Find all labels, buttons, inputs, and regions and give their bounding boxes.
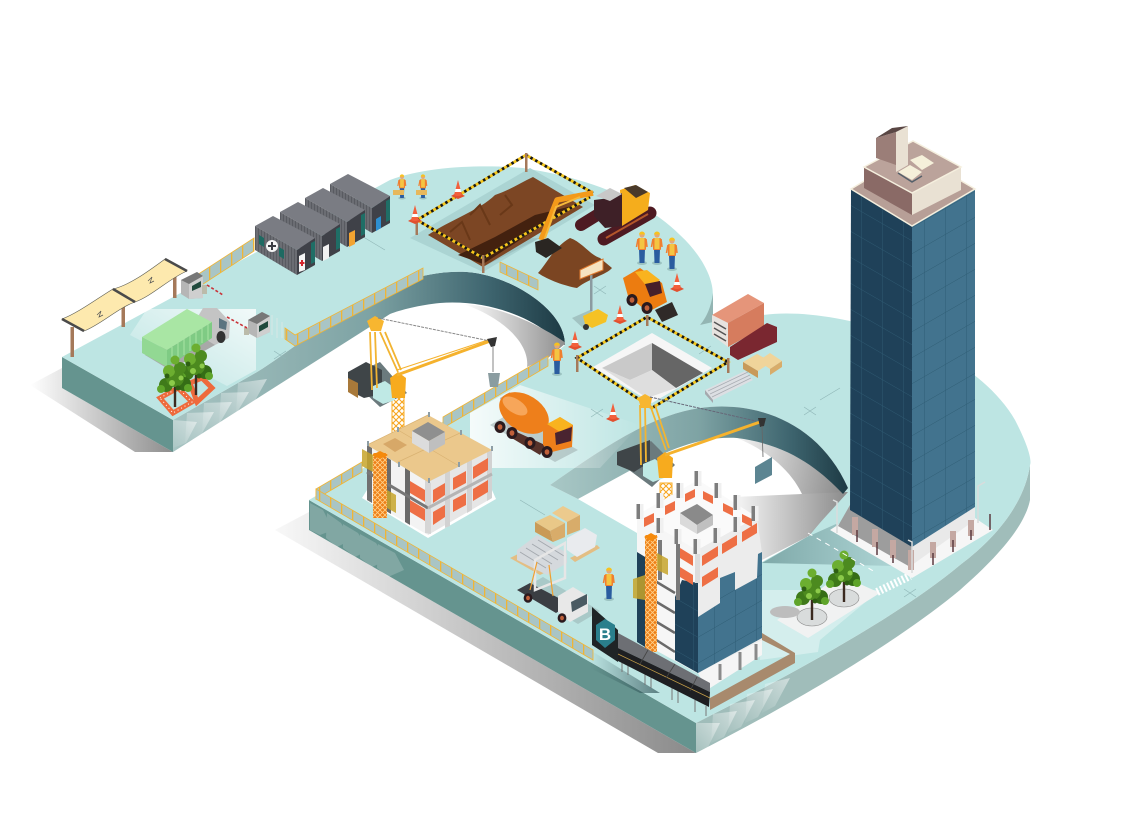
pit: excavation	[410, 153, 595, 273]
platform side: curved front	[696, 465, 1030, 753]
trees with orange fence	[157, 344, 213, 413]
pallets: materials	[510, 506, 600, 575]
wall chevrons: left arm	[173, 379, 267, 448]
crane 1	[348, 316, 500, 441]
walkway shadow on wall	[590, 650, 700, 693]
containers: site offices	[255, 174, 390, 275]
curved wall: first arch	[173, 272, 565, 452]
building 2 with glass cladding	[633, 471, 762, 690]
notch wall beside upper bulge	[700, 293, 713, 325]
dirt pile	[538, 238, 612, 288]
wall chevrons: lower left	[310, 503, 404, 577]
hole shadow: first arch	[463, 304, 566, 367]
timber boxes	[743, 353, 782, 378]
platform side: left arm	[62, 357, 173, 452]
truck with green container	[142, 308, 230, 370]
hole shadow: second arch crescent	[737, 438, 845, 537]
crosswalk and road markings	[808, 533, 910, 592]
fence: inner edge of lower block	[443, 356, 548, 428]
ground shadow: lower block	[275, 512, 696, 753]
flatbed truck	[517, 543, 600, 624]
plaza with trees	[770, 550, 880, 638]
covered walkway	[618, 633, 710, 716]
traffic cones	[408, 180, 684, 422]
worker near truck	[604, 568, 614, 601]
canopy	[62, 259, 187, 357]
grid markers	[274, 235, 975, 597]
ground shadow: left arm	[30, 368, 173, 452]
hoarding: brown board	[710, 633, 795, 710]
hole shadow: second arch floor	[733, 492, 848, 560]
tower shadow on platform	[762, 524, 897, 566]
light tower	[572, 259, 608, 330]
tower base slab	[830, 505, 993, 578]
shipping container: rust	[712, 294, 764, 347]
fence: far left of lower block	[316, 462, 362, 499]
fence: back of left arm	[197, 238, 254, 288]
fence: top of pit	[500, 262, 538, 290]
curved wall: second arch	[550, 407, 848, 499]
crane 2	[617, 394, 772, 513]
light glow near truck	[130, 309, 256, 386]
worker near pit	[552, 342, 562, 376]
hole: second arch	[550, 407, 848, 570]
fence: front of left arm	[285, 268, 423, 346]
platform top surface	[62, 166, 1030, 723]
square pit with tape	[576, 315, 730, 408]
excavator	[535, 185, 650, 258]
platform side: lower left	[309, 500, 696, 753]
tower	[850, 126, 975, 547]
site sign: B	[599, 625, 611, 644]
building 1 under construction	[362, 412, 496, 538]
light glow near mixer	[470, 385, 640, 468]
cement mixer truck	[490, 383, 578, 462]
guard booth: upper	[181, 272, 223, 299]
guard booth: lower	[227, 312, 282, 338]
workers group	[636, 232, 677, 271]
skid steer loader	[623, 268, 678, 322]
light glow near plaza	[760, 590, 880, 660]
steel bars pile	[705, 371, 753, 403]
site sign	[592, 607, 618, 662]
fence: long lower edge	[316, 489, 593, 660]
street lamps	[833, 482, 985, 573]
bricks stack	[730, 323, 777, 360]
wall chevrons: front	[696, 678, 790, 752]
workers seated	[393, 174, 427, 200]
